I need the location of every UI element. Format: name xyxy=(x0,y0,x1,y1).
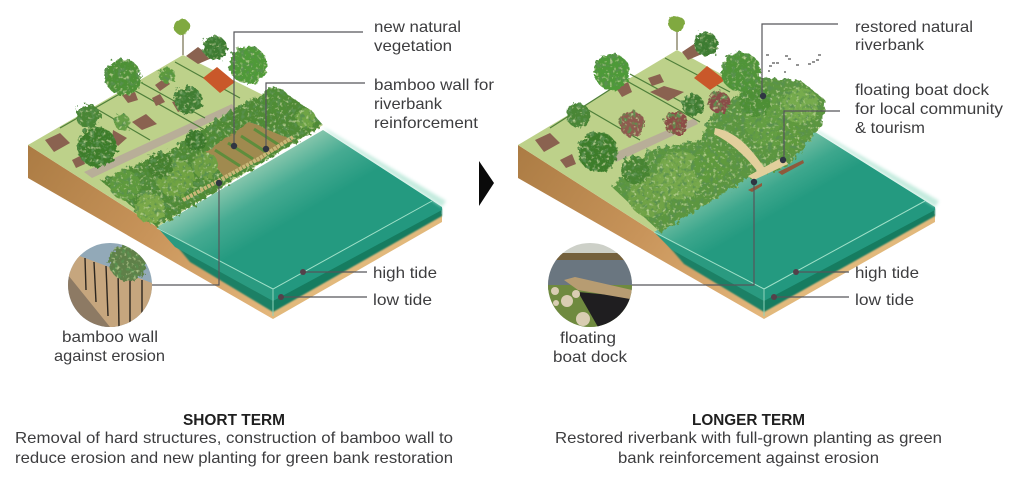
moored boats xyxy=(748,160,804,192)
leader lines and dots xyxy=(152,24,849,300)
bamboo poles xyxy=(68,255,152,327)
leader: bamboo photo xyxy=(152,183,219,285)
water surface xyxy=(654,130,935,289)
leader: high tide right xyxy=(796,271,849,273)
far treeline xyxy=(556,253,624,261)
sand edge right xyxy=(764,214,935,319)
trees xyxy=(76,36,267,167)
leader: high tide left xyxy=(303,271,367,273)
house plot lines xyxy=(60,62,240,140)
leader: restored riverbank xyxy=(762,24,838,96)
footpath xyxy=(610,118,698,162)
rocks xyxy=(551,287,590,326)
label: new natural vegetation: new natural xyxy=(374,19,461,36)
caption: short term xyxy=(15,412,453,467)
flock of birds xyxy=(766,55,821,72)
dot: high tide right xyxy=(793,269,799,275)
dock platform xyxy=(564,277,632,299)
caption: longer term xyxy=(555,412,942,467)
water front band xyxy=(273,201,442,301)
riparian vegetation xyxy=(100,87,323,227)
palm tree xyxy=(669,16,685,50)
leader: new natural vegetation xyxy=(234,32,363,146)
pole gaps xyxy=(85,258,142,327)
dot: low tide right xyxy=(771,294,777,300)
mint glow behind water xyxy=(323,127,446,207)
photo: floating dock xyxy=(548,243,632,327)
water face shadow xyxy=(165,208,442,312)
sand edge right xyxy=(273,214,442,319)
label: low tide right: low tide xyxy=(855,292,914,309)
grass bank xyxy=(548,285,632,327)
water face shadow xyxy=(660,208,935,312)
shadow xyxy=(578,292,632,327)
label: floating boat dock: boat dock xyxy=(553,349,628,366)
dense shrubs xyxy=(110,87,315,223)
labels xyxy=(54,19,1003,366)
orange roof house xyxy=(694,66,725,90)
leader: bamboo wall for reinforcement xyxy=(266,83,365,149)
label: new natural vegetation xyxy=(374,19,461,55)
land surface xyxy=(28,55,323,227)
label: high tide left: high tide xyxy=(373,265,437,282)
dot: low tide left xyxy=(278,294,284,300)
label: bamboo wall for riverbank reinforcement: riverbank xyxy=(374,96,443,113)
lake water xyxy=(548,260,632,290)
label: low tide left: low tide xyxy=(373,292,432,309)
label: floating boat dock xyxy=(553,330,628,366)
dot: boat dock xyxy=(780,157,786,163)
leader: floating boat dock xyxy=(784,111,840,160)
dot: vegetation xyxy=(231,143,237,149)
arrow xyxy=(479,161,494,206)
soil block xyxy=(518,145,764,319)
leader: dock photo xyxy=(632,182,754,285)
description: longer term: Restored riverbank with full-grown planting as green xyxy=(555,430,942,447)
label: floating boat dock for local community and tourism: for local community xyxy=(855,101,1003,118)
label: restored natural riverbank: restored natural xyxy=(855,19,973,36)
planted farm strip xyxy=(205,122,292,178)
canopy clusters xyxy=(621,84,818,217)
label: bamboo wall for riverbank reinforcement: bamboo wall for xyxy=(374,77,495,94)
panel: short term diagram xyxy=(28,19,446,319)
corner edge xyxy=(763,289,765,316)
label: bamboo wall against erosion: against erosion xyxy=(54,348,165,365)
houses xyxy=(535,44,702,168)
houses xyxy=(45,47,212,168)
lush restored vegetation xyxy=(612,78,825,232)
dot: high tide left xyxy=(300,269,306,275)
bamboo wall xyxy=(183,137,293,200)
corner edge xyxy=(272,289,274,316)
description: short term xyxy=(15,430,453,467)
purple red trees xyxy=(619,91,730,137)
heading: longer term: LONGER TERM xyxy=(692,412,805,429)
label: bamboo wall against erosion xyxy=(54,329,165,365)
water left band xyxy=(654,232,764,301)
dot: bamboo wall xyxy=(216,180,222,186)
heading: short term: SHORT TERM xyxy=(183,412,285,429)
mud bank xyxy=(68,270,115,327)
label: bamboo wall against erosion: bamboo wall xyxy=(62,329,158,346)
description: short term: reduce erosion and new planting for green bank restoration xyxy=(15,450,453,467)
label: floating boat dock for local community and tourism: floating boat dock xyxy=(855,82,990,99)
panel: longer term diagram xyxy=(518,16,939,319)
label: restored natural riverbank xyxy=(855,19,973,54)
farm rows xyxy=(215,129,279,166)
description: short term: Removal of hard structures, construction of bamboo wall to xyxy=(15,430,453,447)
orange roof house xyxy=(203,67,235,93)
photo: bamboo wall xyxy=(68,243,152,327)
water surface xyxy=(157,130,442,289)
label: floating boat dock for local community and tourism: & tourism xyxy=(855,120,925,137)
label: bamboo wall for riverbank reinforcement xyxy=(374,77,495,132)
leader: low tide right xyxy=(774,296,849,298)
high tide outline xyxy=(654,201,925,289)
water front band xyxy=(764,201,935,301)
label: high tide right: high tide xyxy=(855,265,919,282)
label: new natural vegetation: vegetation xyxy=(374,38,452,55)
label: floating boat dock: floating xyxy=(560,330,616,347)
high tide outline xyxy=(157,201,432,289)
photo foliage xyxy=(109,243,147,281)
label: floating boat dock for local community and tourism xyxy=(855,82,1003,137)
water left band xyxy=(157,227,273,301)
mint glow behind water xyxy=(812,127,939,207)
palm tree xyxy=(174,19,190,55)
label: bamboo wall for riverbank reinforcement: reinforcement xyxy=(374,115,479,132)
footpath xyxy=(84,104,236,178)
house plot lines xyxy=(550,58,730,140)
dot: reinforcement xyxy=(263,146,269,152)
soil block xyxy=(28,145,273,319)
land surface xyxy=(518,50,820,232)
leader: low tide left xyxy=(281,296,367,298)
trees xyxy=(566,32,761,172)
boardwalk and dock xyxy=(714,128,788,180)
label: restored natural riverbank: riverbank xyxy=(855,37,925,54)
dot: riverbank xyxy=(760,93,766,99)
dot: dock xyxy=(751,179,757,185)
description: longer term: bank reinforcement against erosion xyxy=(618,450,879,467)
description: longer term xyxy=(555,430,942,467)
